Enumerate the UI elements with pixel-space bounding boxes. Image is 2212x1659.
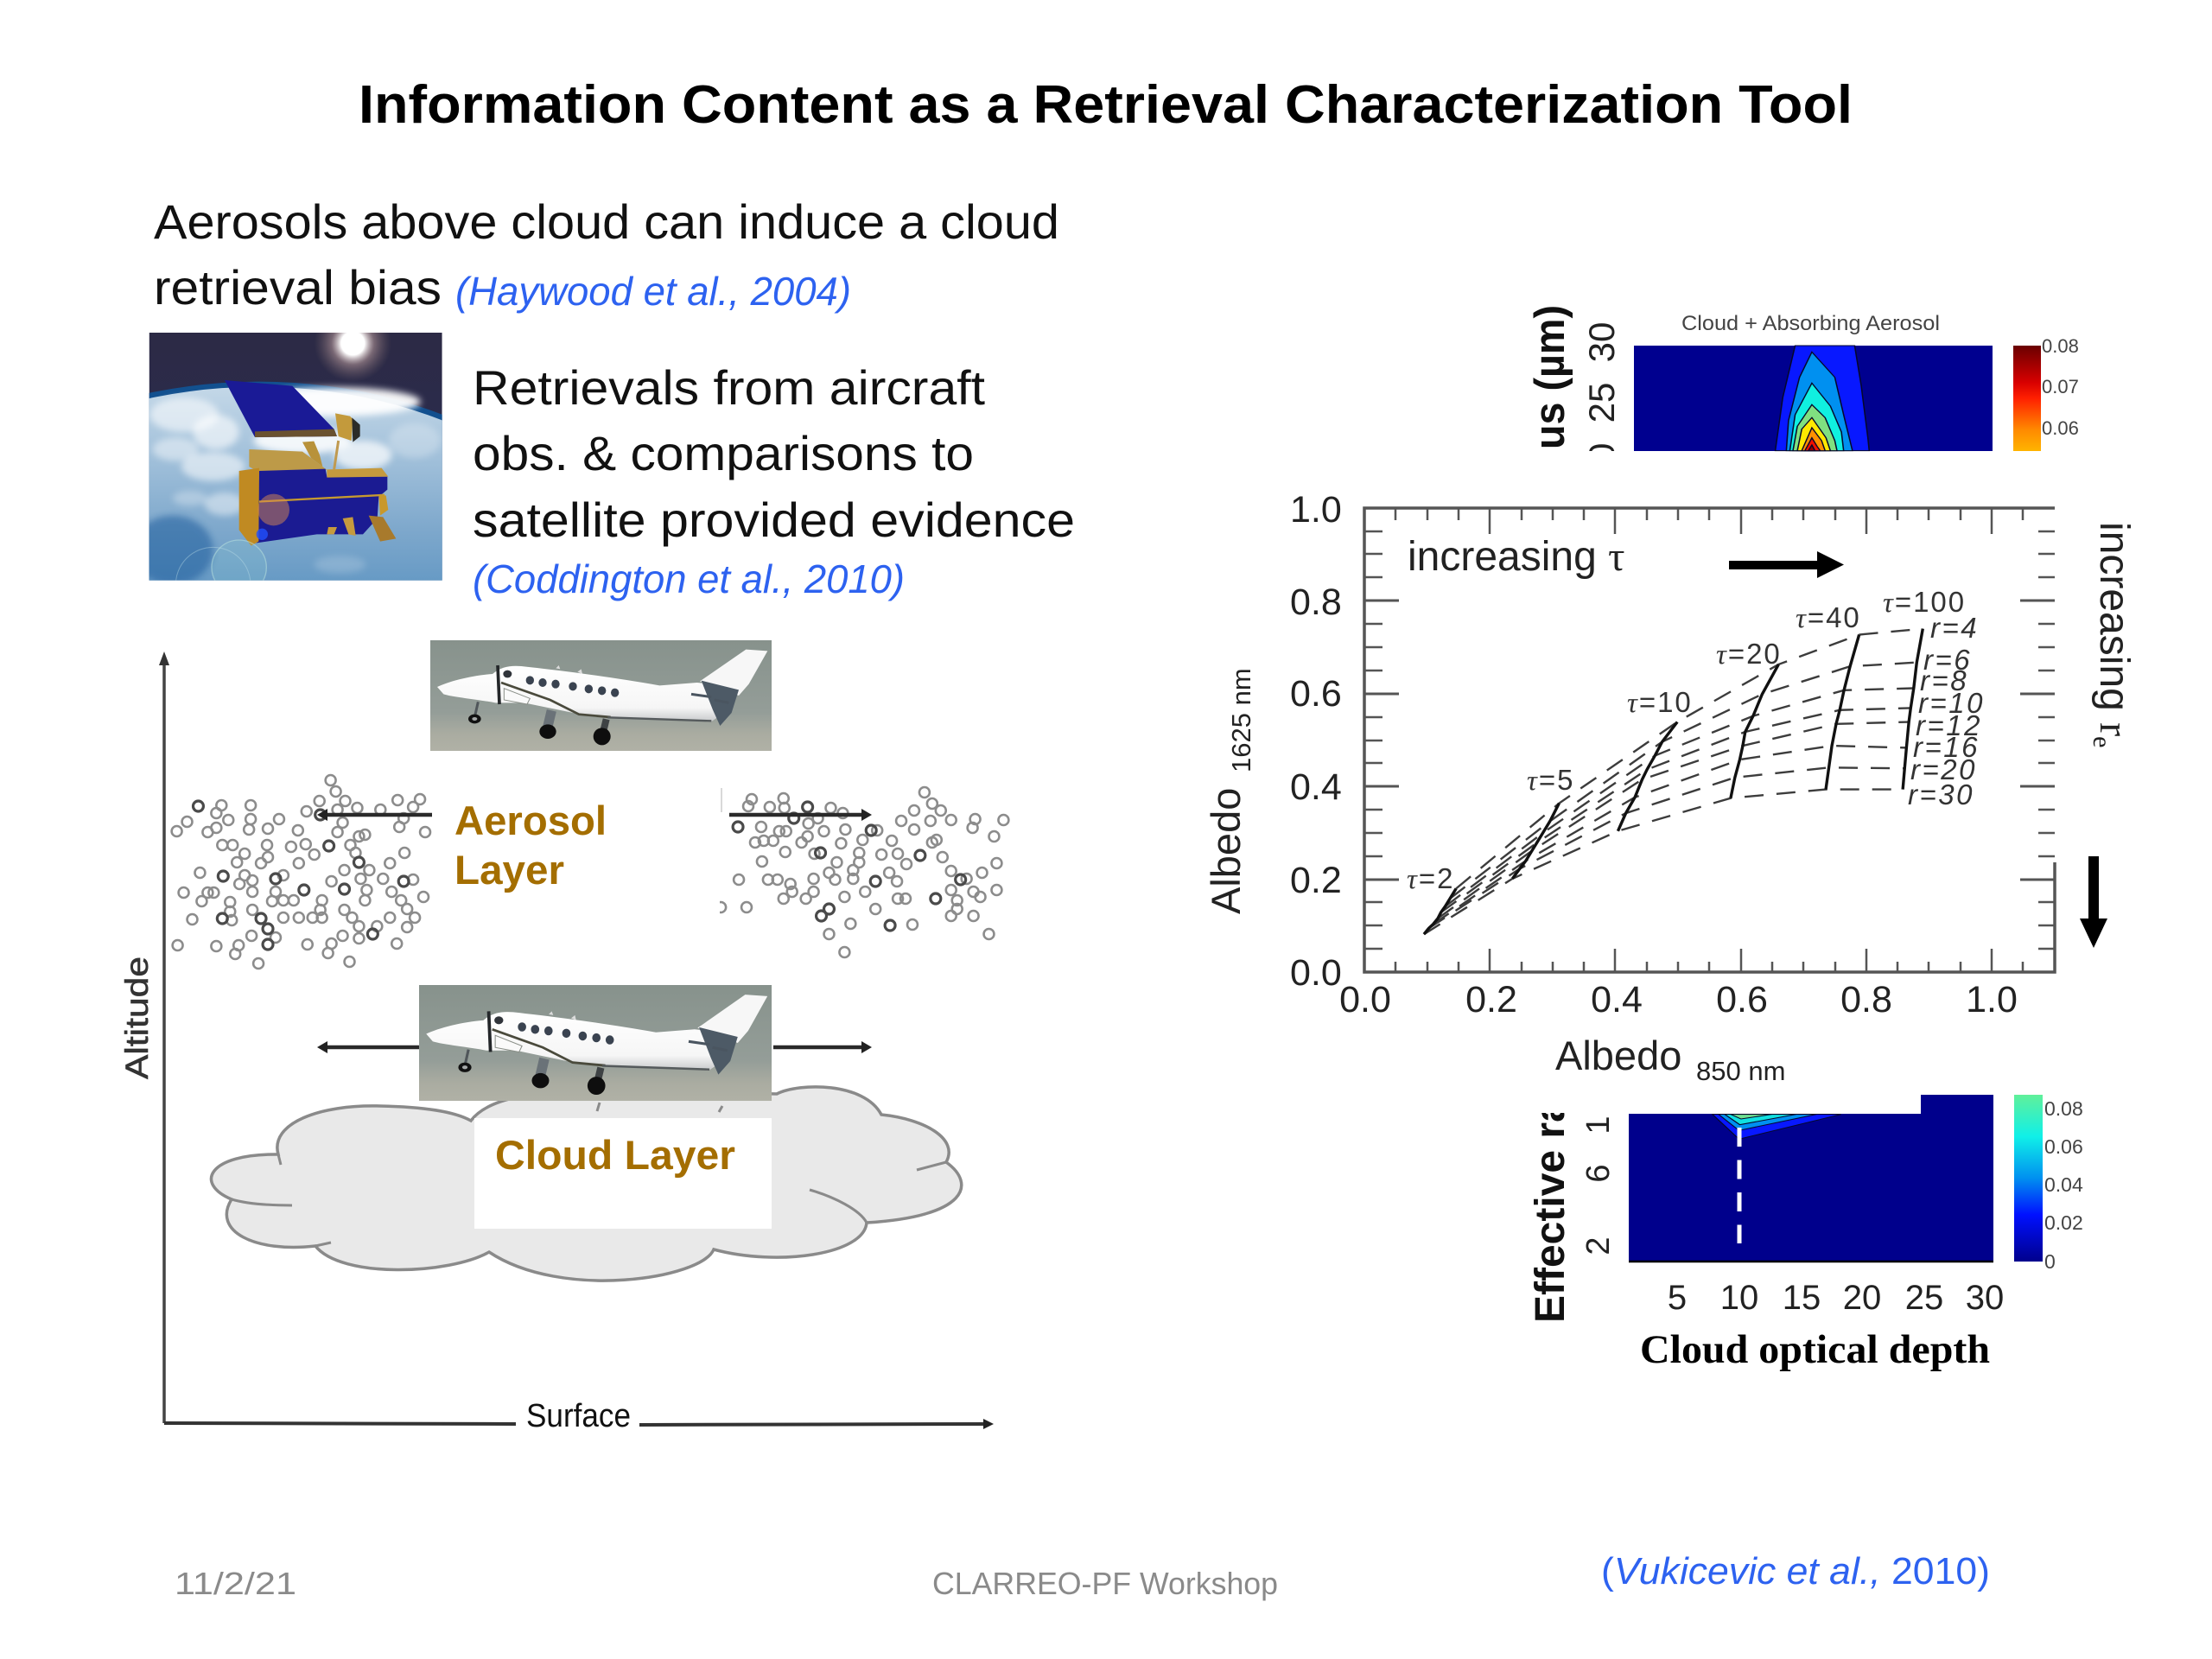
y axis label and ticks: Effective radius <box>1528 1014 1573 1323</box>
increasing re note: increasing r <box>2091 522 2137 736</box>
y axis tick labels: 0.2 <box>1290 860 1342 901</box>
text block: retrievals from aircraft: (Coddington et al., 2010) <box>473 556 905 601</box>
effective radius labels: r=4 <box>1930 612 1979 644</box>
footer date: 11/2/21 <box>175 1566 296 1601</box>
x axis tick labels: 20 <box>1843 1279 1881 1317</box>
arrow: increasing re <box>2080 856 2107 948</box>
effective radius labels <box>1908 612 1985 810</box>
text block: retrievals from aircraft: obs. & comparisons to <box>473 426 974 480</box>
y axis title <box>1203 668 1256 914</box>
effective radius labels: r=6 <box>1923 644 1972 676</box>
x axis tick labels: 1.0 <box>1966 979 2018 1020</box>
text block: aerosols above cloud: Aerosols above cloud can induce a cloud <box>154 194 1059 249</box>
text block: retrievals from aircraft: Retrievals from aircraft <box>473 360 985 415</box>
text block: retrievals from aircraft <box>473 360 1075 601</box>
colour bar: 0.07 <box>2042 376 2079 397</box>
tau labels: τ=5 <box>1527 764 1574 797</box>
tau labels <box>1407 586 1966 895</box>
x axis tick labels: 10 <box>1720 1279 1758 1317</box>
text block: aerosols above cloud <box>154 194 1059 315</box>
chart: top heat map <box>1533 307 2078 451</box>
antenna <box>335 413 360 442</box>
y axis tick labels: 0.6 <box>1290 673 1342 715</box>
label box: aerosol layer: Layer <box>454 847 564 893</box>
arrow: upper flight track <box>317 809 872 821</box>
effective radius labels: r=30 <box>1908 779 1974 810</box>
y axis label and ticks: 2 <box>1580 1236 1617 1255</box>
x axis tick labels: 0.6 <box>1716 979 1768 1020</box>
y axis tick labels: 0.4 <box>1290 766 1342 808</box>
x axis title: 850 nm <box>1696 1056 1785 1086</box>
surface axis: Surface <box>526 1398 631 1434</box>
x axis tick labels <box>1339 979 2018 1020</box>
x axis tick labels: 0.8 <box>1840 979 1892 1020</box>
x axis tick labels: 25 <box>1905 1279 1943 1317</box>
tau labels: τ=2 <box>1407 862 1454 895</box>
chart: bottom heat map <box>1534 1095 2082 1371</box>
altitude axis: Altitude <box>119 957 155 1079</box>
x axis tick labels: 0.0 <box>1339 979 1391 1020</box>
x axis tick labels: 5 <box>1668 1279 1687 1317</box>
y axis title: Albedo <box>1203 788 1249 914</box>
text block: aerosols above cloud: (Haywood et al., 2004) <box>455 269 851 314</box>
y axis title: 1625 nm <box>1226 668 1256 772</box>
y axis label and ticks: 30 <box>1581 322 1622 362</box>
tau labels: τ=100 <box>1883 586 1966 619</box>
y axis label and ticks: us (µm) <box>1527 305 1573 449</box>
x axis tick labels <box>1668 1279 2004 1317</box>
x axis title <box>1555 1033 1785 1086</box>
label box: cloud layer <box>474 1118 772 1229</box>
footer workshop: CLARREO-PF Workshop <box>932 1566 1278 1601</box>
panel: altitude schematic <box>119 640 1008 1434</box>
colour bar: 0 <box>2044 1250 2056 1273</box>
text block: aerosols above cloud: retrieval bias <box>154 260 442 315</box>
contour field <box>1629 1095 1993 1262</box>
y axis tick labels: 0.8 <box>1290 582 1342 623</box>
colour bar: 0.06 <box>2042 417 2079 439</box>
photo: upper aircraft <box>430 640 772 751</box>
colour bar <box>2014 1095 2083 1273</box>
photo: lower aircraft <box>419 985 772 1101</box>
colour bar <box>2013 335 2079 451</box>
effective radius labels: r=16 <box>1913 731 1980 763</box>
title: Information Content as a Retrieval Characterization Tool <box>359 75 1853 135</box>
label box: cloud layer: Cloud Layer <box>495 1132 735 1178</box>
chart: albedo scatter <box>1203 489 2137 1086</box>
x axis tick labels: 0.4 <box>1591 979 1643 1020</box>
citation: Vukicevic: (Vukicevic et al., 2010) <box>1601 1550 1990 1592</box>
effective radius labels: r=8 <box>1920 664 1968 696</box>
y axis label and ticks: 20 <box>1581 443 1622 483</box>
altitude axis <box>119 652 169 1423</box>
solar panel <box>225 380 337 437</box>
aerosol particles left <box>172 775 430 969</box>
icon: satellite over earth <box>149 333 442 581</box>
cloud <box>212 1087 962 1281</box>
colour bar: 0.08 <box>2042 335 2079 357</box>
x axis tick labels: 15 <box>1783 1279 1821 1317</box>
tau labels: τ=20 <box>1716 638 1782 671</box>
x axis title: Cloud optical depth <box>1640 1327 1990 1372</box>
spacecraft body <box>239 449 396 546</box>
y axis tick labels: 1.0 <box>1290 489 1342 531</box>
label box: aerosol layer <box>432 783 721 938</box>
chart title: Cloud + Absorbing Aerosol <box>1681 312 1940 335</box>
dashed marker line <box>1737 1128 1742 1243</box>
arrow: lower flight track <box>317 1041 872 1053</box>
surface axis <box>164 1398 994 1434</box>
y axis tick labels <box>1290 489 1342 994</box>
effective radius labels: r=12 <box>1916 709 1982 741</box>
y axis tick labels: 0.0 <box>1290 952 1342 994</box>
tau labels: τ=40 <box>1796 601 1861 634</box>
arrow: increasing tau <box>1729 551 1844 578</box>
x axis tick labels: 30 <box>1966 1279 2004 1317</box>
contour field <box>1634 346 1993 451</box>
tau labels: τ=10 <box>1627 686 1693 719</box>
increasing re note: e <box>2088 736 2116 747</box>
colour bar: 0.04 <box>2044 1173 2083 1196</box>
retrieval lookup grid <box>1424 629 1923 934</box>
y axis label and ticks: 1 <box>1580 1116 1617 1135</box>
colour bar: 0.08 <box>2044 1097 2083 1120</box>
y axis label and ticks: 25 <box>1581 383 1622 423</box>
y axis label and ticks: 6 <box>1580 1164 1617 1183</box>
x axis tick labels: 0.2 <box>1465 979 1517 1020</box>
y axis label and ticks <box>1534 1113 1609 1320</box>
effective radius labels: r=20 <box>1910 753 1977 785</box>
colour bar: 0.02 <box>2044 1211 2083 1234</box>
y axis label and ticks <box>1533 307 1614 451</box>
aerosol particles right <box>715 787 1008 957</box>
effective radius labels: r=10 <box>1918 687 1985 719</box>
text block: retrievals from aircraft: satellite provided evidence <box>473 493 1075 547</box>
increasing tau note: increasing τ <box>1408 534 1624 580</box>
label box: aerosol layer: Aerosol <box>454 798 607 843</box>
colour bar: 0.06 <box>2044 1135 2083 1158</box>
x axis title: Albedo <box>1555 1033 1681 1078</box>
axes and ticks <box>1364 508 2055 972</box>
